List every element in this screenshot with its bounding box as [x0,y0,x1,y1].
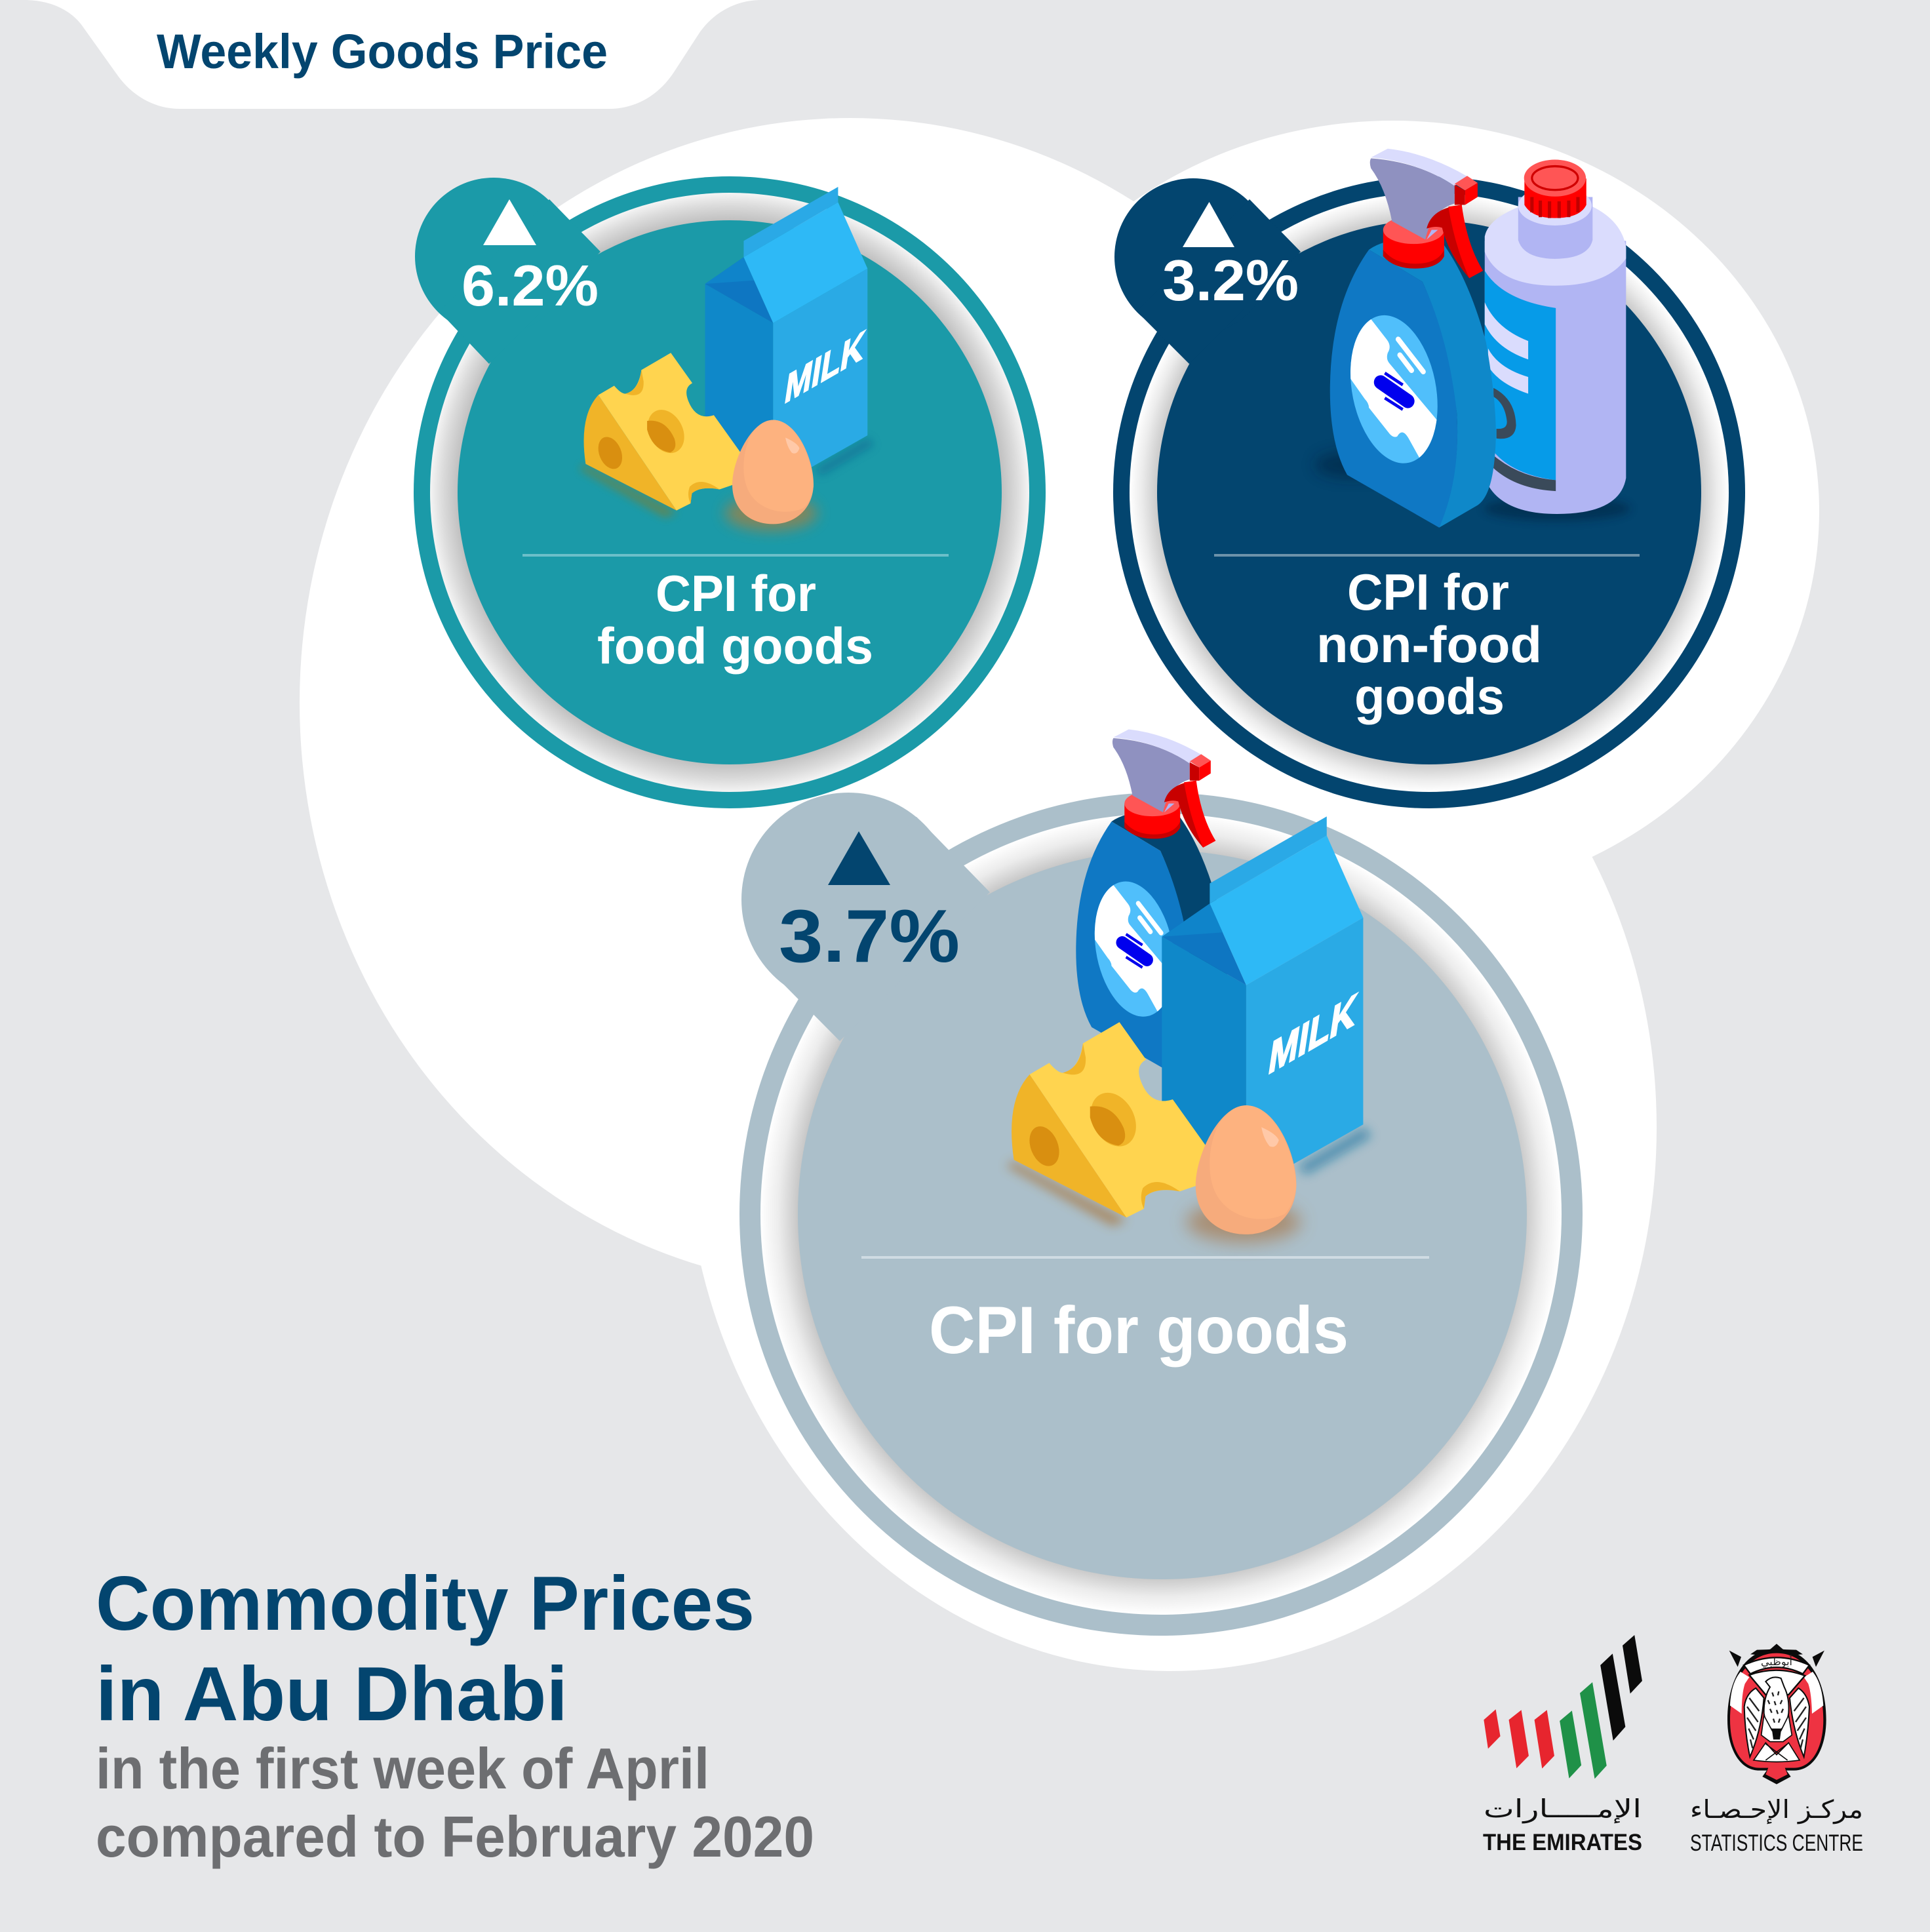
label: CPI for food goods: food goods [597,617,873,675]
icon: milk, cheese and egg: MILK [782,321,868,413]
callout: all goods change 3.7% [741,793,990,1041]
header tab: Weekly Goods Price [157,24,608,79]
callout: food goods change 6.2%: 6.2% [462,253,599,318]
callout: non-food goods change 3.2% [1114,178,1301,364]
logo: Statistics Centre emblem: أبوظبي [1761,1655,1792,1668]
label: CPI for non-food goods: goods [1354,667,1505,725]
logo: The Emirates [1483,1635,1642,1855]
logo: The Emirates: الإمـــــارات [1484,1794,1642,1824]
panel: CPI for food goods [414,176,1046,808]
title block: in the first week of April [96,1736,709,1801]
callout: all goods change 3.7%: 3.7% [779,895,960,978]
logo: The Emirates: THE EMIRATES [1483,1830,1642,1855]
panel: CPI for non-food goods [1113,149,1745,808]
label: CPI for non-food goods: non-food [1316,616,1542,673]
icon: milk, cheese and egg large [1007,816,1371,1242]
icon: spray bottle [1076,729,1227,1075]
label: CPI for food goods [597,564,873,675]
title block: compared to February 2020 [96,1804,814,1869]
title block [96,1560,814,1869]
logo: Statistics Centre emblem: STATISTICS CENTRE [1690,1830,1863,1856]
callout: food goods change 6.2% [415,178,601,364]
callout: non-food goods change 3.2%: 3.2% [1162,248,1299,313]
title block: Commodity Prices [96,1560,755,1646]
logo: Statistics Centre emblem [1690,1644,1863,1856]
header tab [24,0,761,109]
white background blob [300,118,1819,1671]
logo: Statistics Centre emblem: مركـز الإحـصـاء [1690,1795,1863,1824]
icon: milk, cheese and egg [580,187,874,530]
title block: in Abu Dhabi [96,1651,568,1737]
label: CPI for goods: CPI for goods [929,1293,1349,1368]
icon: milk, cheese and egg large: MILK [1265,983,1360,1085]
icon: detergent bottles [1314,149,1630,528]
label: CPI for non-food goods: CPI for [1347,563,1509,621]
panel: CPI for goods [739,729,1583,1636]
label: CPI for food goods: CPI for [656,564,816,622]
label: CPI for non-food goods [1316,563,1542,725]
